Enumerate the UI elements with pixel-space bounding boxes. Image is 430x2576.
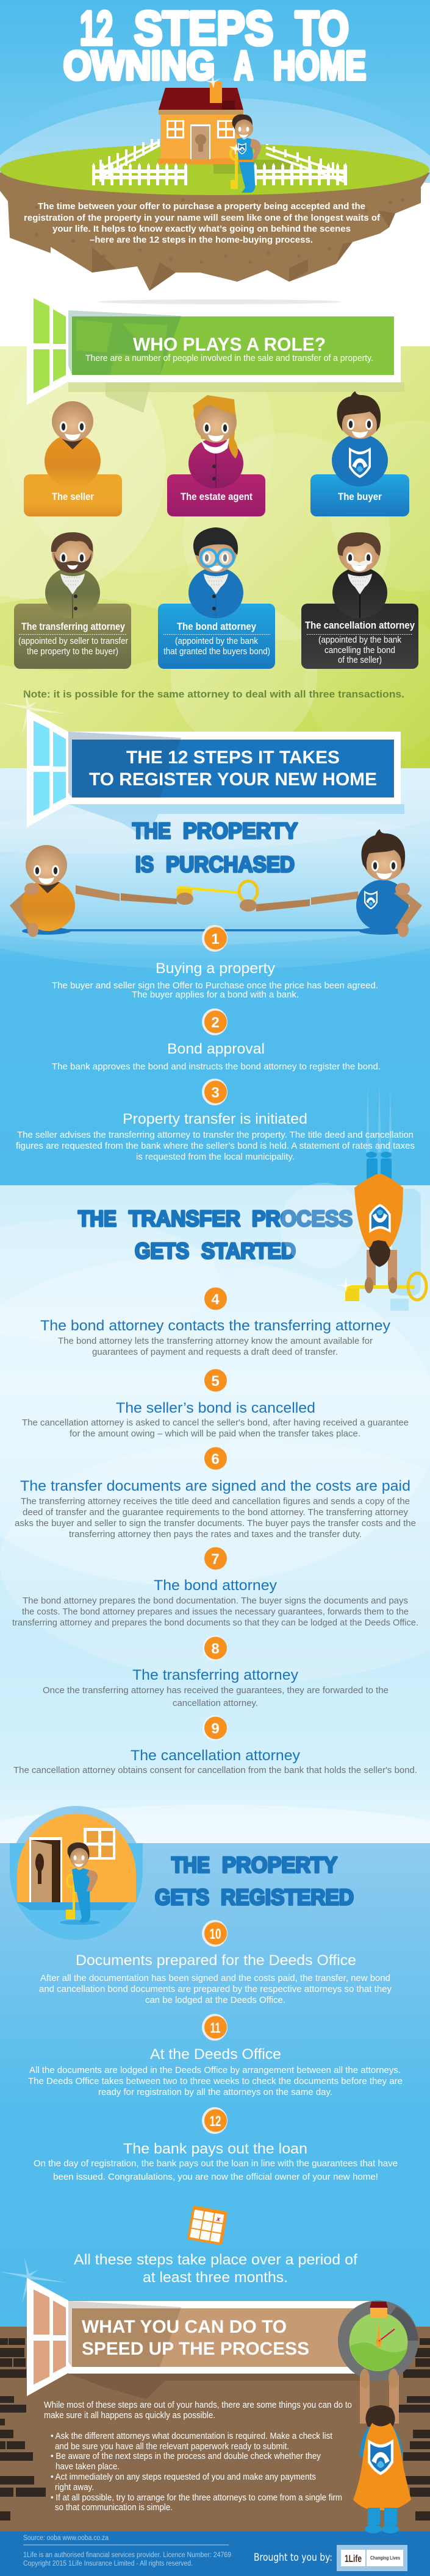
heading: the property is purchased: PURCHASED <box>166 852 295 877</box>
role: the transferring attorney: The transferring attorney <box>21 621 125 632</box>
heading: the property gets registered: GETS <box>155 1885 209 1910</box>
background swooshes <box>0 813 430 969</box>
step 2 <box>52 1008 381 1072</box>
badge 6 <box>204 1447 227 1469</box>
role: the bond attorney <box>158 527 275 669</box>
badge 11: 11 <box>210 2020 221 2036</box>
intro text: registration of the property in your name will seem like one of the longest waits of <box>24 213 381 223</box>
badge 1 <box>202 925 228 952</box>
step 6: The transfer documents are signed and the costs are paid <box>20 1478 410 1494</box>
step 8 <box>43 1635 389 1708</box>
step 11: The Deeds Office takes between two to three weeks to check the documents before they are <box>28 2076 403 2086</box>
text block: speed up tips: • If at all possible, try to arrange for the three attorneys to come from a single firm <box>51 2492 342 2503</box>
step 2: Bond approval <box>167 1041 265 1057</box>
heading: the property is purchased <box>132 818 298 877</box>
three months statement <box>74 2252 357 2286</box>
badge 3: 3 <box>211 1085 220 1101</box>
text block: speed up tips: have taken place. <box>56 2461 120 2472</box>
step 11: All the documents are lodged in the Deeds Office by arrangement between all the attorneys. <box>29 2065 401 2075</box>
footer: 1Life logo: 1Life <box>345 2553 362 2564</box>
badge 7: 7 <box>211 1551 220 1568</box>
step 5: The seller’s bond is cancelled <box>116 1400 315 1416</box>
text block: speed up tips: • Act immediately on any steps requested of you and make any payments <box>51 2472 316 2482</box>
step 1: The buyer applies for a bond with a bank. <box>132 990 299 1000</box>
illustration: hero at the front door <box>9 1806 143 1940</box>
step 3: is requested from the local municipality. <box>136 1152 295 1162</box>
heading: the transfer process gets started: TRANSFER <box>129 1206 240 1231</box>
step 6: asks the buyer and seller to sign the transfer documents. The buyer pays the transfer costs and the <box>15 1518 416 1529</box>
panel: who plays a role: WHO PLAYS A ROLE? <box>133 334 326 355</box>
heading: the property gets registered <box>155 1852 354 1910</box>
section background: brick wall <box>0 2327 430 2531</box>
step 5 <box>22 1369 409 1439</box>
step 7: The bond attorney prepares the bond documentation. The buyer signs the documents and pays <box>23 1596 408 1606</box>
section background: transfer process <box>0 1185 430 1843</box>
icon: calendar <box>187 2205 228 2246</box>
role: the cancellation attorney: The cancellation attorney <box>305 619 415 631</box>
step 7: transferring attorney and prepares the bond documents so that they can be lodged at the Deeds Office. <box>12 1618 418 1628</box>
step 4: The bond attorney lets the transferring attorney know the amount available for <box>58 1336 373 1346</box>
heading: the property is purchased: IS <box>135 852 154 877</box>
step 3: Property transfer is initiated <box>123 1111 307 1127</box>
hero character with key <box>229 115 261 193</box>
section background: registered band <box>0 1843 430 2327</box>
icon: calendar: x <box>215 2215 221 2224</box>
heading: the property gets registered: THE <box>171 1852 210 1877</box>
background swooshes <box>0 1219 430 1902</box>
illustration: flying hero with key <box>281 1082 426 1311</box>
role: the cancellation attorney: cancelling the bond <box>324 645 395 655</box>
step 1 <box>52 925 378 1000</box>
heading: the transfer process gets started: GETS <box>135 1238 189 1263</box>
badge 2 <box>202 1008 228 1035</box>
title: TO <box>295 1 349 55</box>
footer: brought to you by: Brought to you by: <box>254 2552 332 2564</box>
step 1: The buyer and seller sign the Offer to Purchase once the price has been agreed. <box>52 980 378 991</box>
text block: speed up tips: and be sure you have all the relevant paperwork ready to submit. <box>55 2441 289 2452</box>
role: the bond attorney: (appointed by the bank <box>175 636 258 646</box>
text block: speed up tips: right away. <box>55 2482 94 2492</box>
badge 2: 2 <box>211 1015 220 1031</box>
badge 12: 12 <box>210 2113 221 2130</box>
intro text <box>24 201 381 245</box>
role: the cancellation attorney: of the seller) <box>338 655 382 665</box>
footer: 1Life logo: Changing Lives <box>370 2555 400 2561</box>
panel: the 12 steps it takes <box>0 689 404 838</box>
panel: what you can do: WHAT YOU CAN DO TO <box>82 2317 287 2337</box>
heading: the transfer process gets started: STARTED <box>201 1238 296 1263</box>
note: Note: it is possible for the same attorney to deal with all three transactions. <box>23 688 404 700</box>
footer: source and legal: Copyright 2015 1Life Insurance Limited - All rights reserved. <box>23 2560 193 2567</box>
title: 12 <box>80 1 113 55</box>
badge 10: 10 <box>210 1926 221 1943</box>
step 4: guarantees of payment and requests a draft deed of transfer. <box>92 1347 338 1357</box>
role: the bond attorney: that granted the buyers bond) <box>163 646 270 657</box>
step 6: transferring attorney then pays the rates and taxes and the transfer duty. <box>69 1529 362 1540</box>
shadow ellipse under island <box>98 299 342 304</box>
badge 7 <box>204 1547 227 1569</box>
role: the transferring attorney: (appointed by seller to transfer <box>18 636 128 646</box>
role: the transferring attorney: the property to the buyer) <box>27 646 118 657</box>
badge 4: 4 <box>211 1291 220 1308</box>
text block: speed up tips: While most of these steps are out of your hands, there are some things you can do to <box>44 2400 352 2410</box>
step 12: The bank pays out the loan <box>123 2141 307 2157</box>
step 12: been issued. Congratulations, you are now the official owner of your new home! <box>53 2172 378 2182</box>
badge 12 <box>202 2107 228 2134</box>
title <box>63 1 366 88</box>
section background: footer <box>0 2531 430 2576</box>
step 3: The seller advises the transferring attorney to transfer the property. The title deed and cancellation <box>17 1130 414 1140</box>
section background: white band <box>0 183 430 346</box>
panel: the 12 steps it takes: TO REGISTER YOUR NEW HOME <box>89 769 377 790</box>
step 4: The bond attorney contacts the transferring attorney <box>40 1318 391 1334</box>
role: the cancellation attorney: (appointed by the bank <box>318 635 401 645</box>
section background: inner dome <box>0 98 430 317</box>
step 3: figures are requested from the bank where the seller’s bond is held. A statement of rates and taxes <box>16 1141 415 1151</box>
title: HOME <box>273 43 366 88</box>
badge 6: 6 <box>211 1451 220 1468</box>
role: the transferring attorney <box>14 532 131 669</box>
badge 1: 1 <box>211 931 220 947</box>
badge 9 <box>202 1715 227 1741</box>
role: the buyer: The buyer <box>338 491 382 502</box>
badge 4 <box>204 1288 227 1310</box>
text block: speed up tips: make sure it all happens as quickly as possible. <box>44 2410 215 2421</box>
white picket fence <box>92 139 347 185</box>
text block: speed up tips: so that communication is simple. <box>55 2502 173 2513</box>
three months statement: at least three months. <box>143 2269 288 2286</box>
step 11: At the Deeds Office <box>150 2046 281 2063</box>
footer: source and legal: 1Life is an authorised financial services provider. Licence Number: 24769 <box>23 2552 231 2559</box>
floating island <box>0 144 430 291</box>
badge 9: 9 <box>211 1721 220 1737</box>
step 11: ready for registration by all the attorneys on the same day. <box>98 2087 332 2097</box>
title: A <box>234 43 253 88</box>
step 7 <box>12 1547 418 1628</box>
badge 10 <box>202 1920 228 1947</box>
intro text: your life. It helps to know exactly what’s going on behind the scenes <box>52 224 351 234</box>
step 11 <box>28 2014 403 2097</box>
step 8: cancellation attorney. <box>173 1698 258 1708</box>
heading: the transfer process gets started <box>78 1206 353 1263</box>
heading: the transfer process gets started: PROCESS <box>252 1206 353 1231</box>
footer: source and legal <box>23 2535 231 2567</box>
heading: the property is purchased: THE <box>132 818 171 843</box>
step 12: On the day of registration, the bank pays out the loan in line with the guarantees that have <box>34 2158 398 2169</box>
role: the estate agent <box>167 395 265 516</box>
step 5: for the amount owing – which will be paid when the transfer takes place. <box>70 1429 360 1439</box>
heading: the property is purchased: PROPERTY <box>183 818 298 843</box>
badge 5 <box>204 1369 227 1391</box>
text block: speed up tips: • Be aware of the next steps in the process and double check whether they <box>51 2451 321 2461</box>
panel: what you can do: SPEED UP THE PROCESS <box>82 2339 309 2359</box>
panel: who plays a role: There are a number of people involved in the sale and transfer of a property. <box>85 353 373 363</box>
role: the seller: The seller <box>52 491 94 502</box>
heading: the property gets registered: REGISTERED <box>221 1885 354 1910</box>
role: the bond attorney: The bond attorney <box>177 621 256 632</box>
section background: sky <box>0 0 430 183</box>
badge 8 <box>202 1635 227 1661</box>
heading: the property gets registered: PROPERTY <box>222 1852 337 1877</box>
badge 5: 5 <box>211 1373 220 1390</box>
illustration: hero holding clock <box>338 2300 418 2533</box>
section background: green roles <box>0 305 430 768</box>
title: OWNING <box>63 43 215 88</box>
panel: who plays a role <box>27 287 404 413</box>
title: STEPS <box>134 1 273 55</box>
step 10: and cancellation bond documents are prepared by the respective attorneys so that they <box>39 1984 392 1994</box>
badge 11 <box>202 2014 228 2041</box>
badge 3 <box>202 1079 228 1105</box>
footer: 1Life logo <box>337 2545 407 2571</box>
house <box>158 75 293 174</box>
panel: what you can do <box>0 2258 379 2399</box>
role: the buyer <box>310 391 409 516</box>
step 6: The transferring attorney receives the title deed and cancellation figures and sends a copy of the <box>21 1496 410 1507</box>
step 10: can be lodged at the Deeds Office. <box>145 1995 285 2005</box>
section background: outer dome <box>0 78 430 324</box>
step 1: Buying a property <box>156 960 276 977</box>
step 6: deed of transfer and the guarantee requirements to the bond attorney. The transferring attorney <box>23 1507 408 1518</box>
badge 8: 8 <box>211 1641 220 1657</box>
step 7: The bond attorney <box>154 1577 278 1594</box>
step 5: The cancellation attorney is asked to cancel the seller's bond, after having received a guarantee <box>22 1418 409 1428</box>
section background: blue steps <box>0 768 430 1185</box>
step 8: Once the transferring attorney has received the guarantees, they are forwarded to the <box>43 1685 389 1696</box>
heading: the transfer process gets started: THE <box>78 1206 116 1231</box>
step 9 <box>13 1715 417 1775</box>
step 2: The bank approves the bond and instructs the bond attorney to register the bond. <box>52 1061 381 1072</box>
footer: source and legal: Source: ooba www.ooba.co.za <box>23 2535 109 2542</box>
text block: speed up tips: • Ask the different attorneys what documentation is required. Make a check list <box>51 2431 333 2441</box>
step 10 <box>39 1920 392 2005</box>
intro text: The time between your offer to purchase a property being accepted and the <box>38 201 365 212</box>
role: the estate agent: The estate agent <box>181 491 253 502</box>
step 12 <box>34 2107 398 2182</box>
role: the seller <box>24 401 122 516</box>
step 3 <box>16 1079 415 1162</box>
step 6 <box>15 1447 416 1540</box>
role: the cancellation attorney <box>301 532 418 669</box>
panel: the 12 steps it takes: THE 12 STEPS IT TAKES <box>126 747 340 768</box>
step 8: The transferring attorney <box>132 1667 299 1683</box>
step 9: The cancellation attorney <box>131 1747 301 1764</box>
step 10: Documents prepared for the Deeds Office <box>76 1952 356 1969</box>
illustration: seller and buyer exchanging key <box>10 829 422 937</box>
step 9: The cancellation attorney obtains consent for cancellation from the bank that holds the seller's bond. <box>13 1765 417 1775</box>
step 4 <box>40 1288 391 1357</box>
intro text: –here are the 12 steps in the home-buying process. <box>90 235 313 245</box>
text block: speed up tips <box>44 2400 352 2513</box>
step 10: After all the documentation has been signed and the costs paid, the transfer, new bond <box>40 1973 390 1983</box>
step 7: the costs. The bond attorney prepares and issues the necessary guarantees, forwards them to the <box>22 1607 409 1617</box>
three months statement: All these steps take place over a period of <box>74 2252 357 2268</box>
